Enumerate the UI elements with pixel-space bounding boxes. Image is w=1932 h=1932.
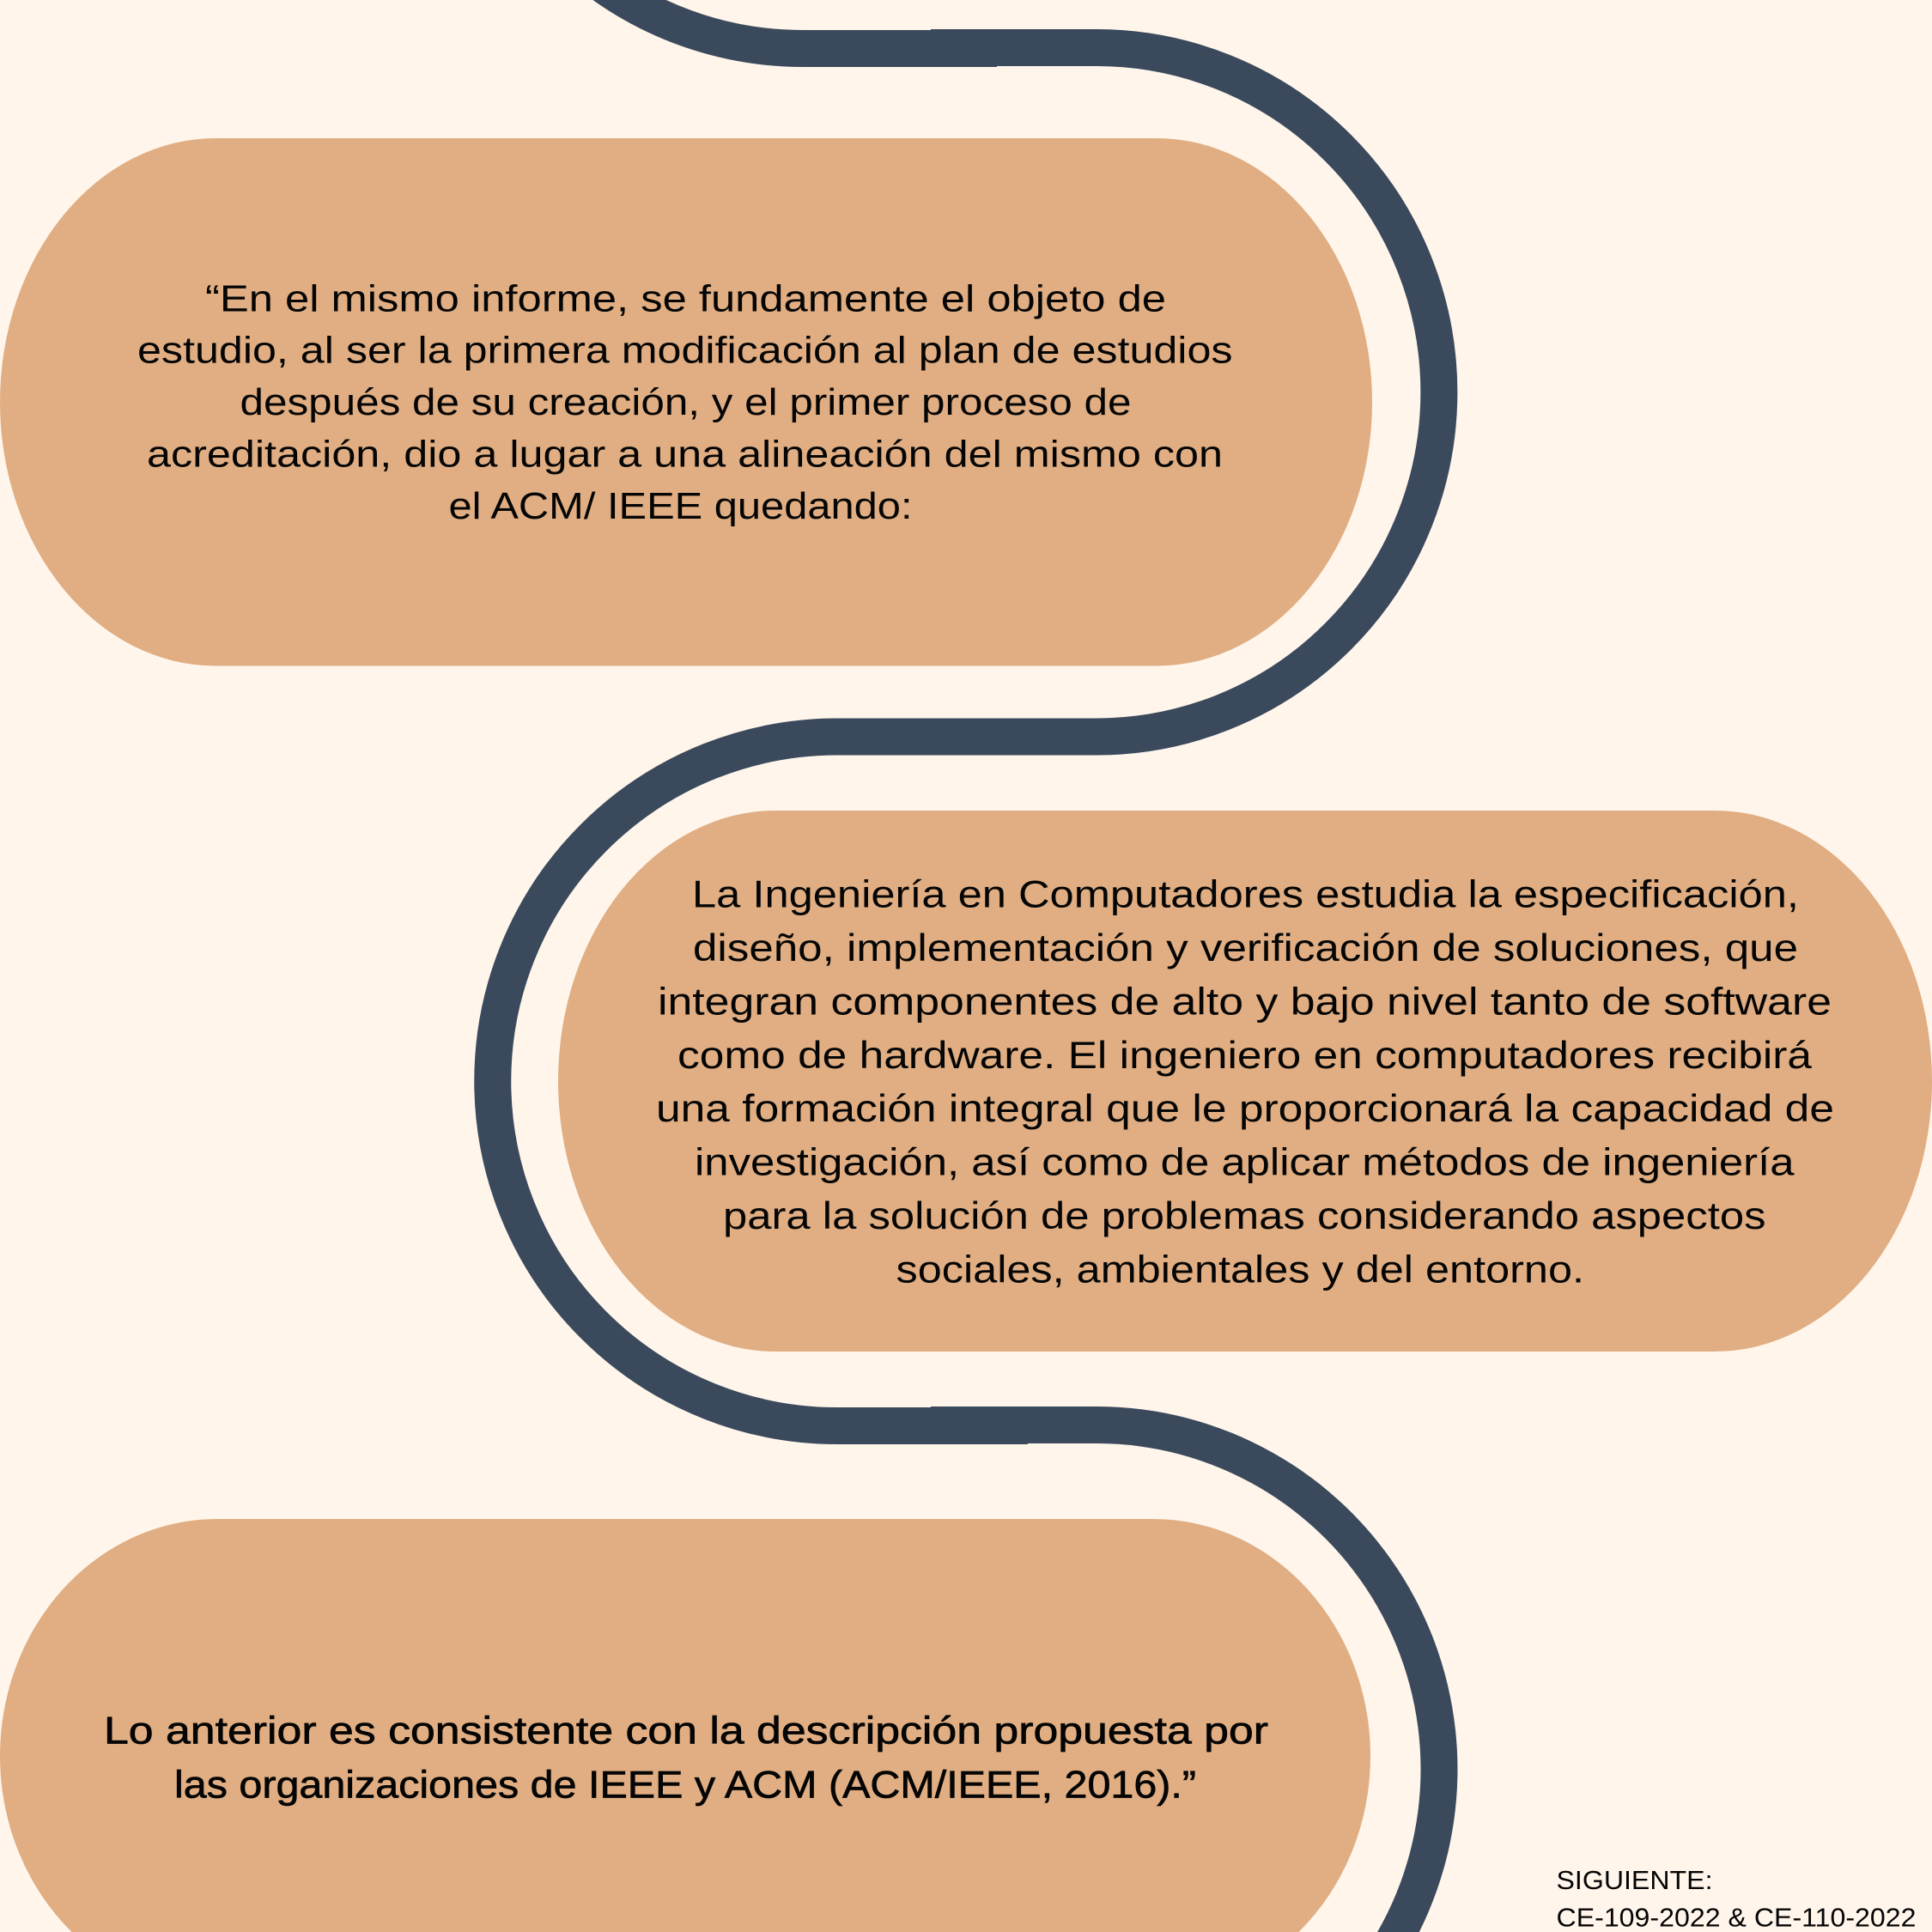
footer: next reference: SIGUIENTE: — [1556, 1866, 1712, 1895]
text block: conclusion — [104, 1710, 1268, 1806]
winding road connector — [493, 0, 1457, 1932]
text block: conclusion: las organizaciones de IEEE y ACM (ACM/IEEE, 2016).” — [174, 1764, 1196, 1806]
text block: definition: para la solución de problemas considerando aspectos — [723, 1195, 1765, 1237]
panel: definition block — [558, 811, 1932, 1352]
text block: first quote: “En el mismo informe, se fundamente el objeto de — [205, 278, 1166, 319]
text block: first quote: el ACM/ IEEE quedando: — [448, 486, 912, 527]
panel: conclusion block — [0, 1519, 1370, 1932]
text block: definition: diseño, implementación y verificación de soluciones, que — [693, 927, 1798, 969]
footer: next reference — [1556, 1866, 1917, 1932]
text block: definition: La Ingeniería en Computadores estudia la especificación, — [692, 874, 1799, 916]
text block: first quote: acreditación, dio a lugar a una alineación del mismo con — [147, 434, 1223, 475]
panel: first quote block — [0, 138, 1372, 666]
footer: next reference: CE-109-2022 & CE-110-2022 — [1556, 1903, 1917, 1932]
text block: first quote: estudio, al ser la primera modificación al plan de estudios — [137, 331, 1233, 372]
text block: definition: investigación, así como de aplicar métodos de ingeniería — [695, 1142, 1795, 1184]
text block: definition: una formación integral que le proporcionará la capacidad de — [656, 1088, 1834, 1130]
text block: definition — [656, 874, 1834, 1291]
text block: definition: sociales, ambientales y del entorno. — [896, 1249, 1584, 1291]
text block: first quote — [137, 278, 1233, 527]
text block: definition: como de hardware. El ingeniero en computadores recibirá — [677, 1035, 1812, 1077]
text block: definition: integran componentes de alto y bajo nivel tanto de software — [658, 981, 1832, 1023]
text block: first quote: después de su creación, y el primer proceso de — [240, 382, 1132, 423]
text block: conclusion: Lo anterior es consistente con la descripción propuesta por — [104, 1710, 1268, 1753]
